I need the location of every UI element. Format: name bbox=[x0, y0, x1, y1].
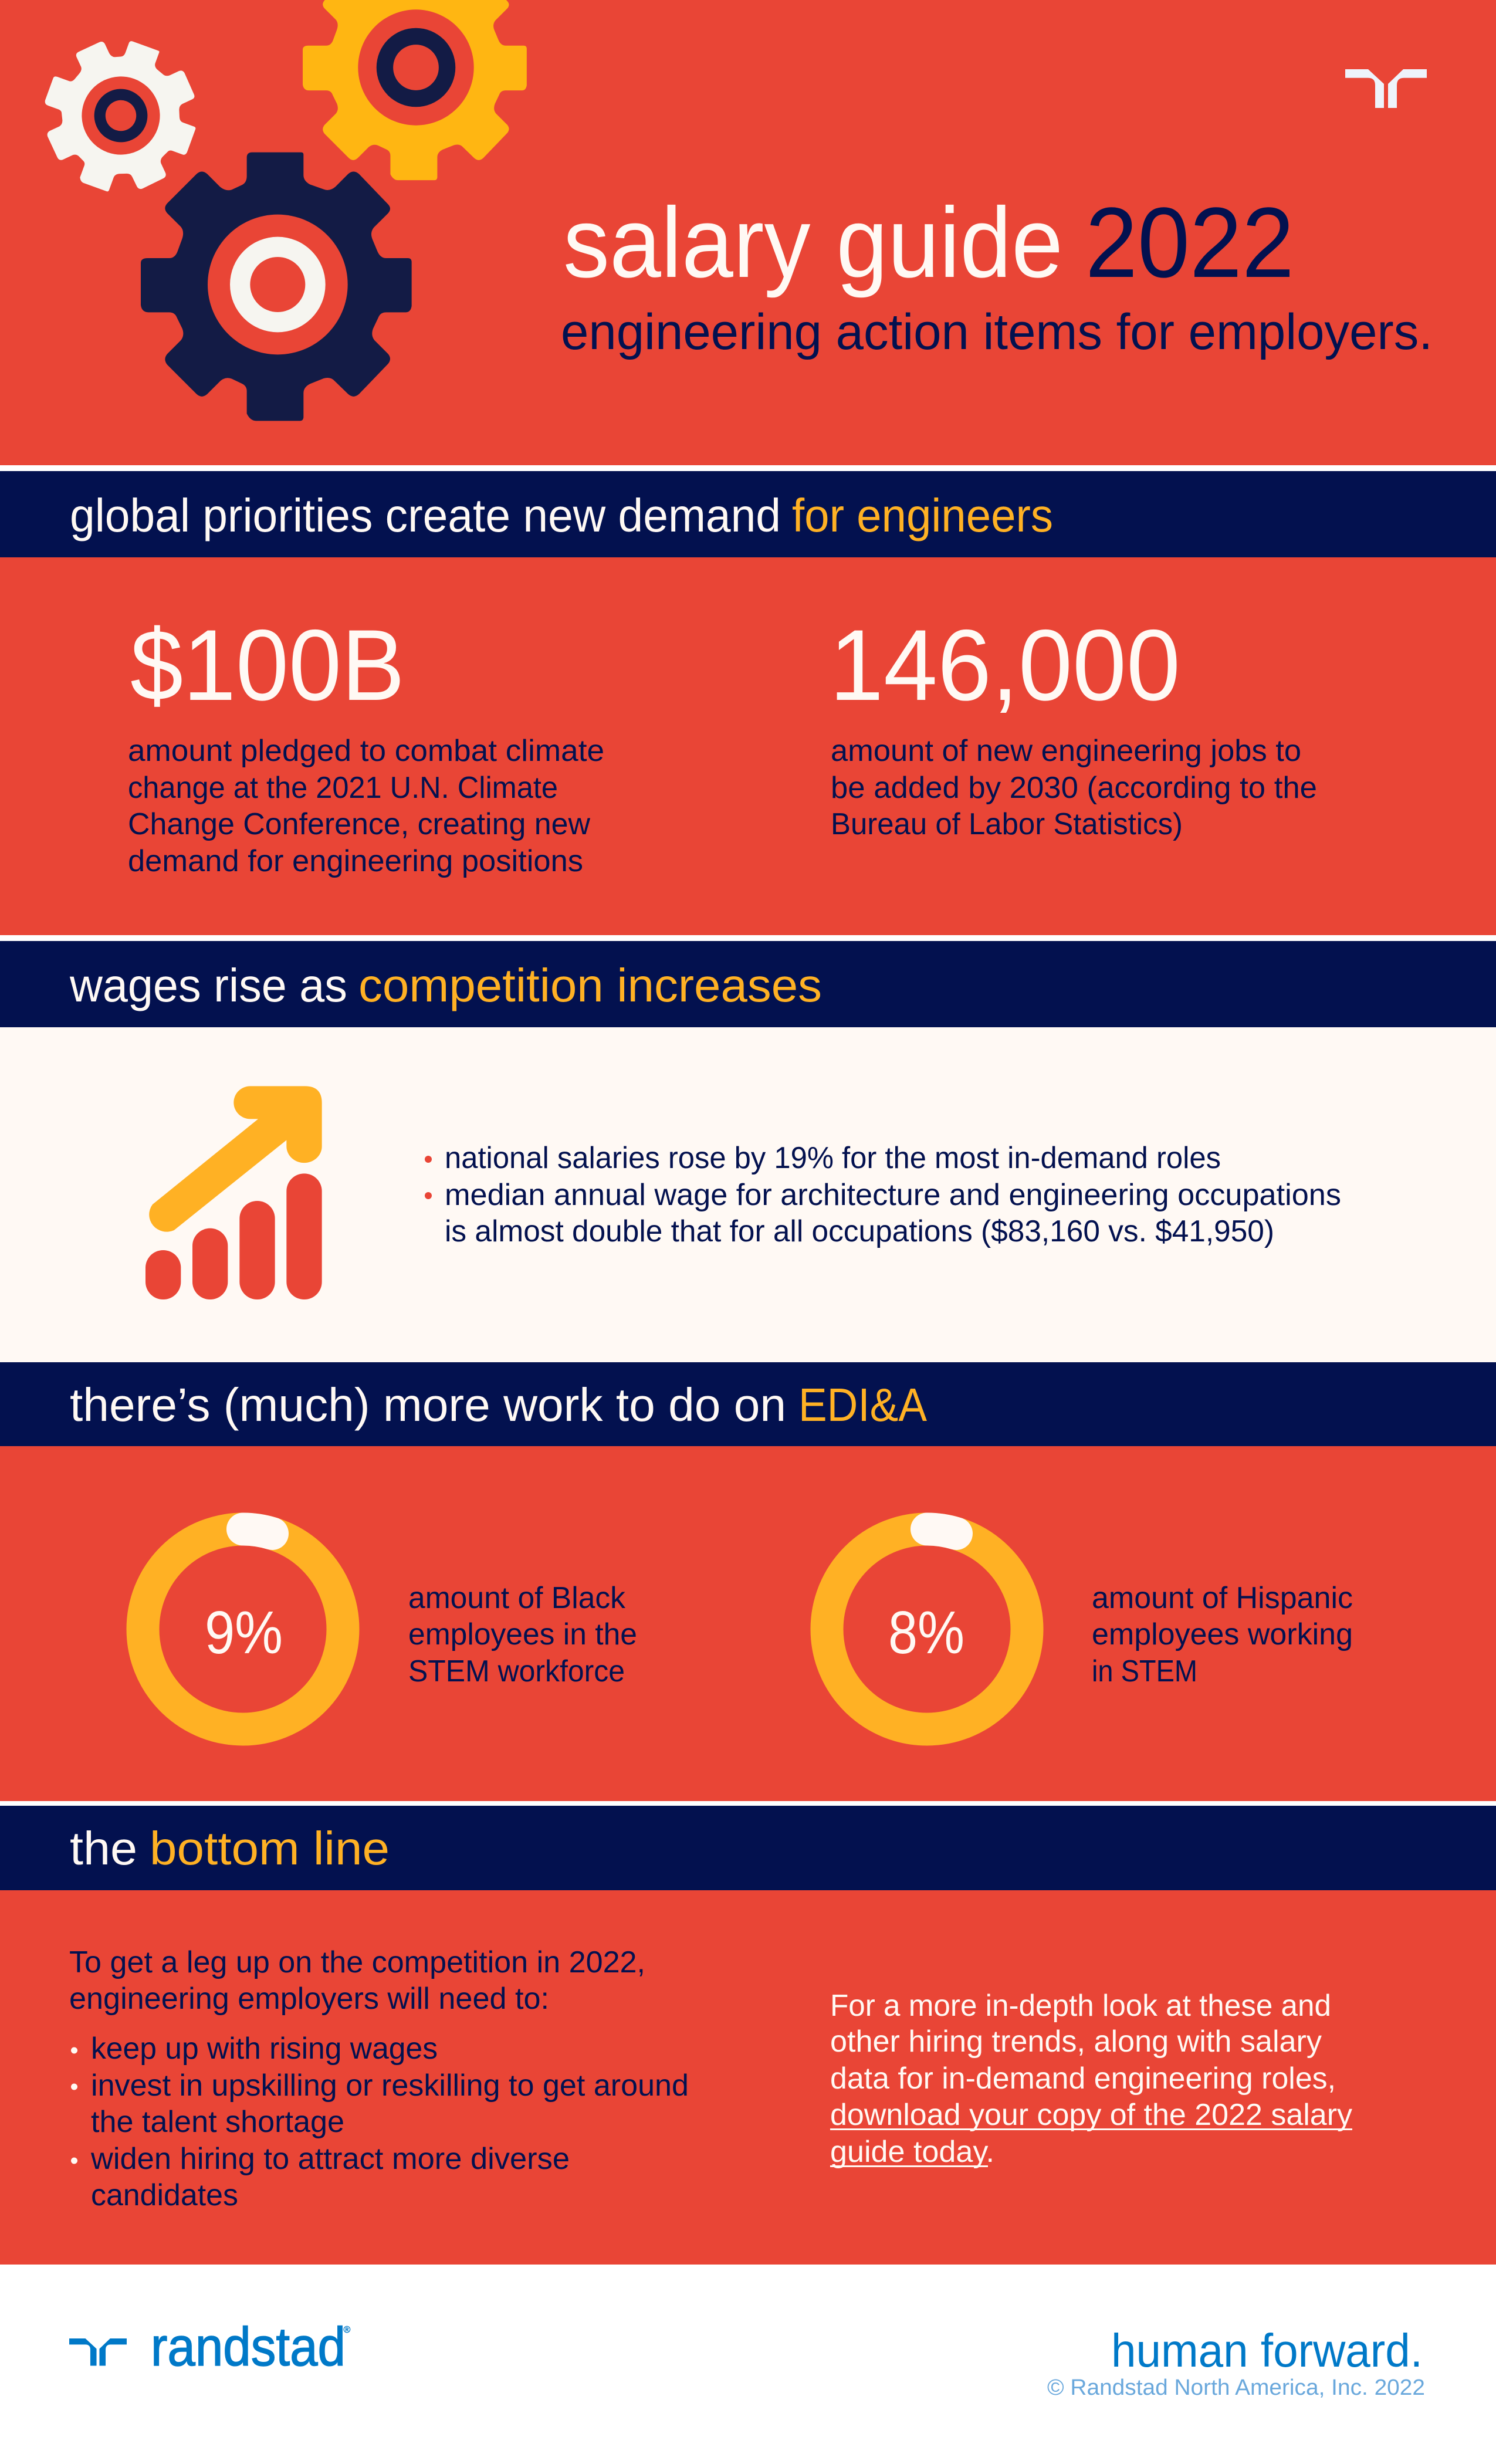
text: hispanic employees: amount of Hispanic bbox=[1092, 1581, 1353, 1615]
logo wordmark: ® bbox=[344, 2325, 351, 2335]
text: black employees: employees in the bbox=[408, 1617, 637, 1651]
text: new engineering jobs: amount of new engineering jobs to bbox=[831, 734, 1301, 768]
donut chart: 8% bbox=[827, 1529, 1027, 1729]
icon: navy gear bbox=[141, 153, 412, 421]
donut chart: 9% bbox=[143, 1529, 343, 1729]
stat: 146,000: 146,000 bbox=[830, 609, 1180, 722]
bullet list: action items: keep up with rising wages bbox=[91, 2032, 438, 2066]
text: hispanic employees: in STEM bbox=[1092, 1654, 1197, 1688]
title: 2022 bbox=[1085, 187, 1294, 299]
text: intro: engineering employers will need to: bbox=[69, 1982, 549, 2016]
text: new engineering jobs bbox=[831, 734, 1317, 841]
text: black employees: STEM workforce bbox=[408, 1654, 625, 1688]
panel: the bottom line bbox=[0, 1890, 1496, 2265]
bullet list: action items: widen hiring to attract more diverse bbox=[90, 2142, 570, 2176]
text: intro bbox=[69, 1945, 645, 2016]
heading: wages rise bbox=[0, 941, 1496, 1027]
text: call to action: download your copy of the 2022 salary bbox=[830, 2098, 1352, 2132]
footer bbox=[69, 2316, 1425, 2400]
bullet list: wage facts: national salaries rose by 19% for the most in-demand roles bbox=[445, 1141, 1221, 1175]
heading: EDI&A: EDI&A bbox=[798, 1379, 928, 1431]
heading: wages rise: wages rise as bbox=[69, 959, 347, 1011]
heading: global priorities bbox=[0, 471, 1496, 557]
bullet list: wage facts: median annual wage for architecture and engineering occupations bbox=[445, 1178, 1341, 1212]
donut chart: 8%: 8% bbox=[888, 1599, 964, 1666]
panel: EDI&A stats bbox=[0, 1446, 1496, 1801]
bullet list: action items: the talent shortage bbox=[91, 2105, 344, 2139]
stat: $100B: $100B bbox=[130, 609, 405, 722]
text: new engineering jobs: be added by 2030 (according to the bbox=[831, 771, 1317, 805]
text: hispanic employees bbox=[1092, 1581, 1353, 1688]
logo wordmark: randstad bbox=[151, 2316, 346, 2377]
text: climate pledge bbox=[128, 734, 604, 878]
icon: randstad logo mark blue bbox=[69, 2338, 127, 2366]
text: climate pledge: amount pledged to combat climate bbox=[128, 734, 604, 768]
heading: wages rise: competition increases bbox=[358, 959, 822, 1011]
panel: global priorities stats bbox=[0, 557, 1496, 935]
text: climate pledge: demand for engineering positions bbox=[128, 844, 583, 878]
bullet list: action items: invest in upskilling or reskilling to get around bbox=[91, 2069, 689, 2103]
bullet list: action items: candidates bbox=[91, 2178, 238, 2212]
bullet list: action items bbox=[71, 2032, 689, 2212]
donut chart: 9%: 9% bbox=[205, 1599, 283, 1666]
icon: randstad logo mark white bbox=[1345, 69, 1427, 108]
panel: hero bbox=[0, 0, 1496, 465]
heading: global priorities: for engineers bbox=[792, 489, 1053, 541]
text: climate pledge: Change Conference, creating new bbox=[128, 807, 590, 841]
text: call to action: For a more in-depth look at these and bbox=[830, 1989, 1331, 2023]
text: call to action bbox=[830, 1989, 1352, 2169]
tagline: human forward. bbox=[1111, 2324, 1423, 2377]
bullet list: wage facts: is almost double that for all occupations ($83,160 vs. $41,950) bbox=[445, 1214, 1274, 1248]
text: intro: To get a leg up on the competition in 2022, bbox=[69, 1945, 645, 1979]
subtitle: engineering action items for employers. bbox=[561, 304, 1433, 360]
title: salary guide bbox=[563, 187, 1063, 299]
text: call to action: guide today. bbox=[830, 2135, 994, 2169]
heading: the bottom line: the bbox=[70, 1822, 137, 1874]
text: call to action: other hiring trends, along with salary bbox=[830, 2025, 1322, 2059]
heading: the bottom line bbox=[0, 1806, 1496, 1890]
icon: yellow gear bbox=[303, 0, 527, 180]
text: call to action: data for in-demand engineering roles, bbox=[830, 2062, 1336, 2096]
text: black employees: amount of Black bbox=[408, 1581, 626, 1615]
chart icon: rising bars and arrow bbox=[145, 1086, 322, 1299]
text: climate pledge: change at the 2021 U.N. Climate bbox=[128, 771, 558, 805]
heading: EDI&A bbox=[0, 1362, 1496, 1446]
icon: white gear bbox=[23, 20, 216, 212]
heading: EDI&A: there’s (much) more work to do on bbox=[70, 1379, 786, 1431]
heading: global priorities: global priorities create new demand bbox=[70, 489, 781, 541]
panel: wages bbox=[0, 1027, 1496, 1362]
copyright: © Randstad North America, Inc. 2022 bbox=[1047, 2375, 1425, 2400]
heading: the bottom line: bottom line bbox=[150, 1822, 390, 1874]
text: hispanic employees: employees working bbox=[1092, 1617, 1353, 1651]
text: black employees bbox=[408, 1581, 637, 1688]
bullet list: wage facts bbox=[425, 1141, 1341, 1248]
text: new engineering jobs: Bureau of Labor Statistics) bbox=[831, 807, 1183, 841]
